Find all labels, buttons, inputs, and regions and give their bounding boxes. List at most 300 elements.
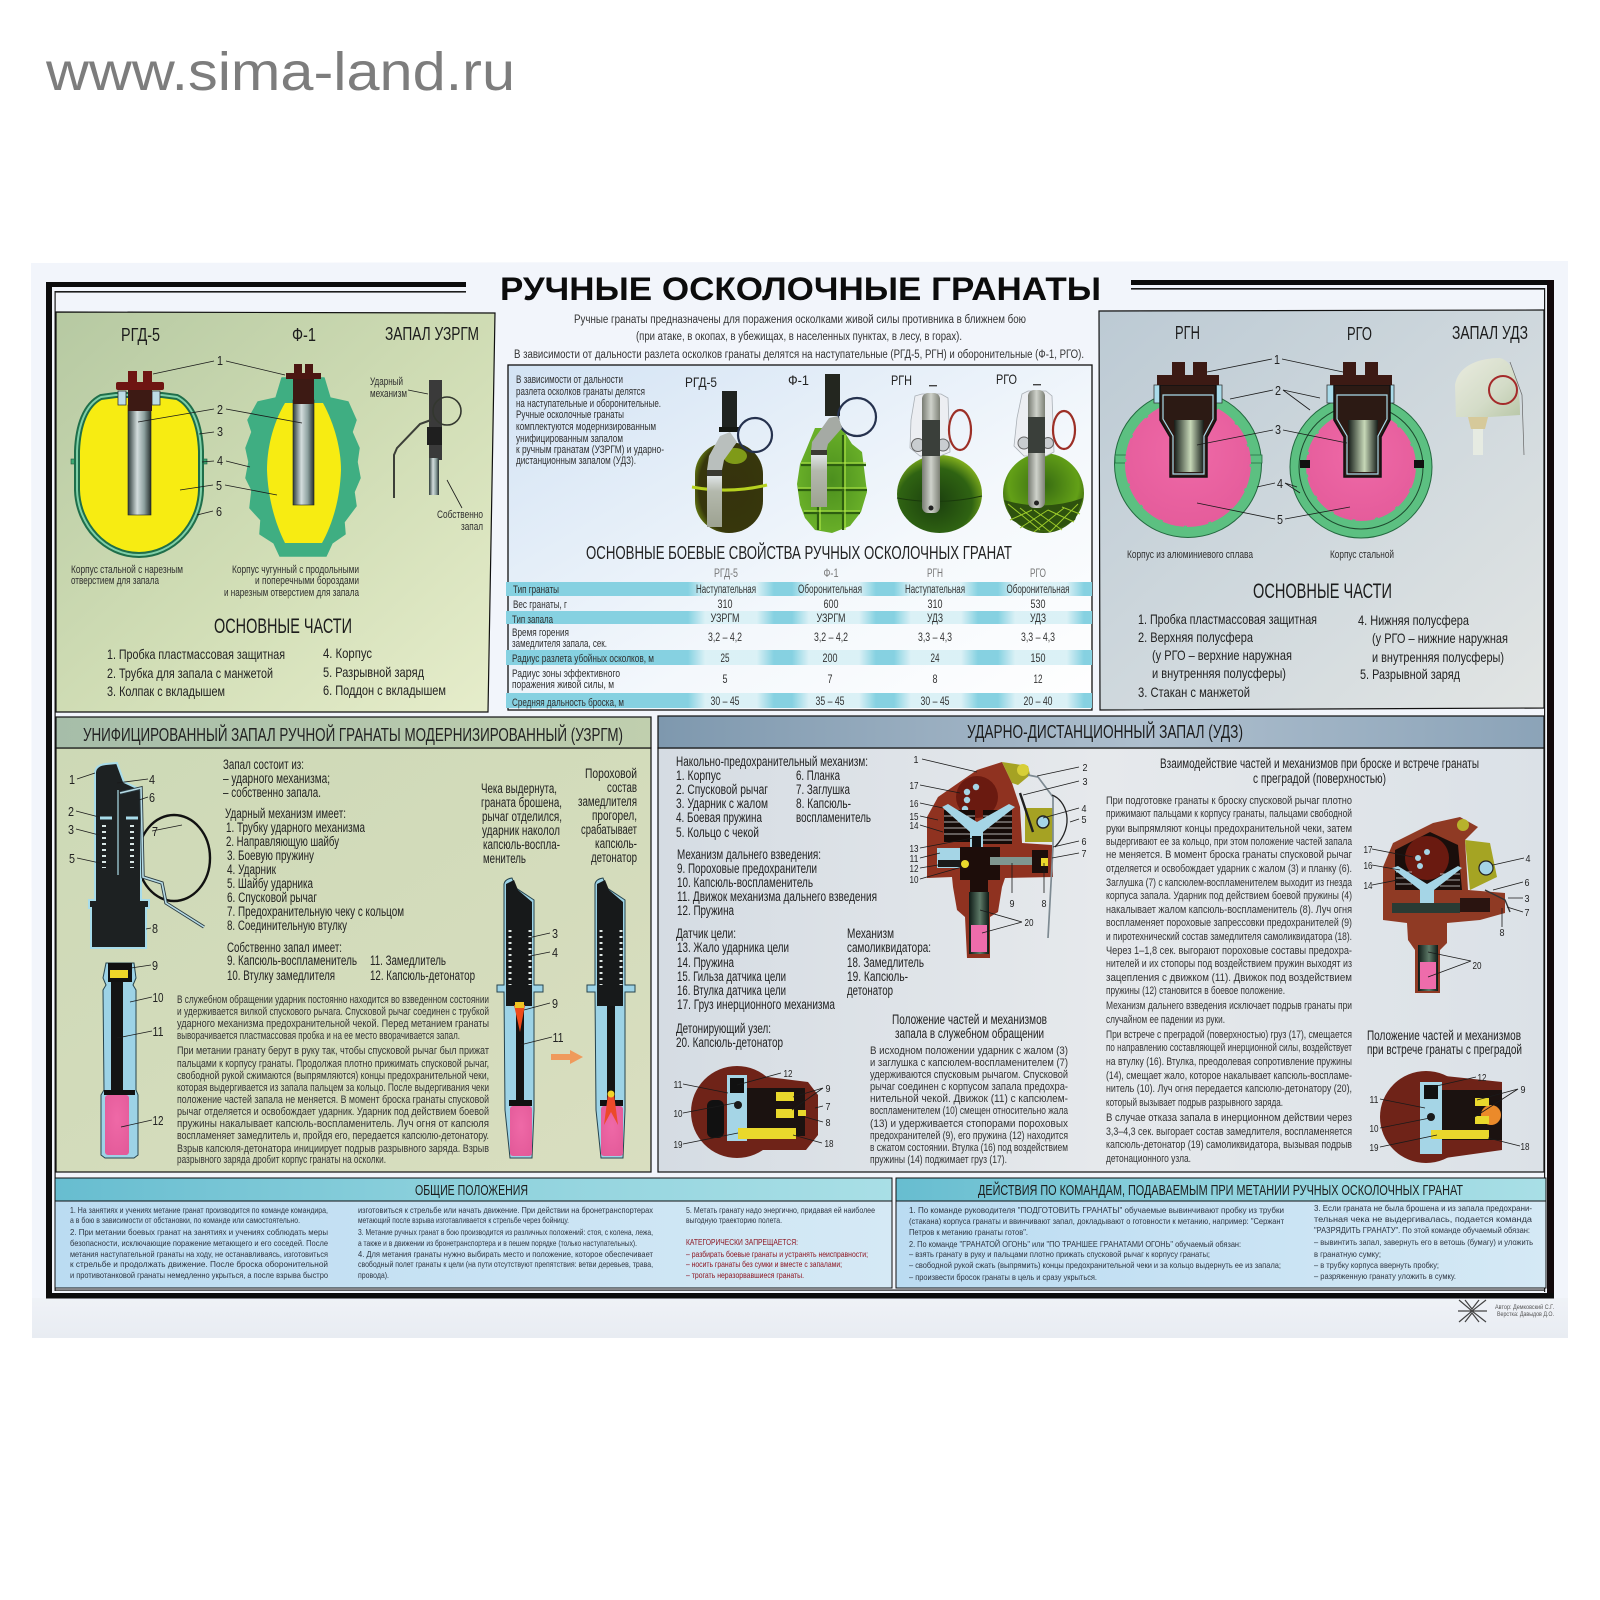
- fuse parts list: 8. Соединительную втулку: [227, 918, 347, 933]
- headings: [1175, 323, 1528, 344]
- fuse parts list: 3. Боевую пружину: [227, 848, 314, 863]
- part numbers: 7: [1082, 848, 1087, 860]
- column 2: – в трубку корпуса ввернуть пробку;: [1314, 1260, 1439, 1270]
- diagram: fuse body: [101, 963, 138, 1158]
- panel header: [658, 716, 1544, 748]
- row labels: Время горения: [512, 627, 569, 639]
- mechanism list: 5. Кольцо с чекой: [676, 825, 759, 840]
- values: УДЗ: [927, 613, 943, 625]
- diagram: fired state 2: [587, 878, 635, 1158]
- part numbers: 4: [1526, 853, 1531, 865]
- parts list: (у РГО – верхние наружная: [1152, 647, 1292, 663]
- subheading service position: Положение частей и механизмов: [892, 1012, 1047, 1027]
- state notes: Чека выдернута,: [481, 781, 557, 796]
- subheading impact position: при встрече гранаты с преградой: [1367, 1042, 1522, 1057]
- parts list: и внутренняя полусферы): [1372, 649, 1504, 665]
- column 2: [358, 1205, 654, 1280]
- part numbers: 5: [1277, 513, 1283, 527]
- part numbers: 2: [217, 403, 223, 417]
- description text: рычаг отделяется и освобождает ударник. Ударник под действием боевой: [177, 1106, 489, 1118]
- credits: Автор: Демковский С.Г.: [1495, 1303, 1554, 1311]
- text interaction: В случае отказа запала в инерционном действии через: [1106, 1112, 1352, 1124]
- row labels: Тип гранаты: [513, 584, 559, 596]
- parts list: [1138, 611, 1508, 700]
- grenade names: РГО: [996, 371, 1017, 387]
- fuse parts list: – ударного механизма;: [223, 771, 330, 786]
- mechanism list: самоликвидатора:: [847, 940, 931, 955]
- part numbers: 2: [1275, 384, 1281, 398]
- watermark: www.sima-land.ru: [45, 42, 515, 102]
- fuse parts list: 6. Спусковой рычаг: [227, 890, 317, 905]
- part numbers: 14: [910, 820, 919, 832]
- column 1: метания наступательной гранаты на ходу, не останавливаясь, изготовиться: [70, 1249, 328, 1259]
- captions: и поперечными бороздами: [255, 575, 359, 587]
- part numbers: 8: [826, 1117, 831, 1129]
- text interaction: случайном ее падении из руки.: [1106, 1014, 1225, 1026]
- column 3: выгодную траекторию полета.: [686, 1215, 782, 1225]
- fuse parts list: 12. Капсюль-детонатор: [370, 968, 475, 983]
- subheading service position: запала в служебном обращении: [895, 1026, 1044, 1041]
- panel: general provisions: [55, 1178, 892, 1288]
- part numbers: 1: [69, 773, 75, 787]
- mechanism list: 10. Капсюль-воспламенитель: [677, 875, 813, 890]
- leader lines: [138, 361, 462, 515]
- column 3: – трогать неразорвавшиеся гранаты.: [686, 1270, 804, 1280]
- text service position: нительной чекой. Движок (11) с капсюлем-: [870, 1093, 1068, 1105]
- fuse parts list: [223, 757, 475, 983]
- mechanism list: 16. Втулка датчика цели: [677, 983, 786, 998]
- headings: РГН: [1175, 323, 1200, 343]
- column 3: [686, 1205, 875, 1280]
- text interaction: нителей и их стопоры под воздействием пружин выходят из: [1106, 958, 1352, 970]
- mechanism list: 4. Боевая пружина: [676, 810, 762, 825]
- part numbers: 2: [1082, 762, 1088, 774]
- ring: [138, 815, 210, 901]
- part numbers: 17: [910, 780, 919, 792]
- diagram: UDZ on impact top view: [1380, 1071, 1502, 1163]
- description text: [177, 994, 489, 1166]
- cell highlights: [688, 582, 1084, 708]
- part numbers: 18: [824, 1138, 834, 1150]
- part numbers: 15: [910, 811, 919, 823]
- part numbers: 1: [217, 354, 223, 368]
- part numbers: 4: [1277, 477, 1283, 491]
- description text: свободной рукой сжимаются (выпрямляются) концы предохранительной чеки,: [177, 1070, 489, 1082]
- column 3: – носить гранаты без сумки и вместе с запалами;: [686, 1259, 842, 1269]
- column 2: изготовиться к стрельбе или начать движение. При действии на бронетранспортерах: [358, 1205, 654, 1215]
- values: 5: [722, 674, 728, 686]
- intro text: В зависимости от дальности разлета осколков гранаты делятся на наступательные (РГД-5, РГН) и оборонительные (Ф-1, РГО).: [514, 349, 1084, 361]
- parts list: [107, 645, 446, 699]
- part numbers: 11: [910, 853, 919, 865]
- column 1: а в бою в зависимости от обстановки, по команде или самостоятельно.: [70, 1215, 300, 1225]
- description text: В служебном обращении ударник постоянно находится во взведенном состоянии: [177, 994, 489, 1006]
- diagram: RGO section: [1290, 362, 1432, 538]
- part numbers: [674, 754, 1088, 1151]
- column 1: (стакана) корпуса гранаты и ввинчивают запал, докладывают о готовности к метанию, например: "Сержант: [909, 1216, 1284, 1226]
- state notes: капсюль-воспла-: [483, 837, 560, 852]
- state notes: капсюль-: [595, 836, 637, 851]
- values: 3,2 – 4,2: [708, 632, 742, 644]
- part numbers: 8: [152, 922, 158, 936]
- column 2: – разряженную гранату уложить в сумку.: [1314, 1271, 1456, 1281]
- diagram: RGD-5 section: [71, 371, 207, 555]
- column 2: тельная чека не выдергивалась, подается команда: [1314, 1214, 1532, 1224]
- poster sheet: [31, 261, 1568, 1338]
- leader lines: [683, 759, 1079, 1144]
- mechanism list: 12. Пружина: [677, 903, 734, 918]
- arrow: [551, 1050, 583, 1064]
- panel header: [55, 1178, 892, 1201]
- part numbers: 4: [149, 773, 155, 787]
- text interaction: нитель (10). Луч огня передается капсюлю-детонатору (20),: [1106, 1083, 1352, 1095]
- text interaction: 3,3–4,3 сек. выгорает состав замедлителя, воспламеняется: [1106, 1126, 1352, 1138]
- parts list: (у РГО – нижние наружная: [1372, 630, 1508, 646]
- frame: [46, 280, 1554, 1298]
- mechanism list: детонатор: [847, 983, 893, 998]
- row bands: [506, 582, 1092, 708]
- column 2: – вывинтить запал, завернуть его в ветошь (бумагу) и уложить: [1314, 1237, 1533, 1247]
- mechanism list: Датчик цели:: [676, 926, 736, 941]
- photo: RGD-5: [692, 391, 772, 533]
- part numbers: 8: [1042, 898, 1047, 910]
- values: 30 – 45: [710, 696, 740, 708]
- text service position: в сжатом состоянии. Втулка (16) под воздействием: [870, 1142, 1068, 1154]
- values: 600: [824, 599, 838, 611]
- text service position: предохранителей (9), его пружина (12) находится: [870, 1130, 1068, 1142]
- mechanism list: Механизм: [847, 926, 894, 941]
- fuse parts list: 1. Трубку ударного механизма: [226, 820, 365, 835]
- captions: Ударный: [370, 376, 403, 388]
- part numbers: 12: [1478, 1072, 1487, 1084]
- heading main parts: ОСНОВНЫЕ ЧАСТИ: [1253, 580, 1392, 603]
- heading main parts: ОСНОВНЫЕ ЧАСТИ: [214, 615, 352, 638]
- grenade names: Ф-1: [788, 372, 809, 388]
- fuse parts list: Запал состоит из:: [223, 757, 304, 772]
- values: 35 – 45: [816, 696, 844, 708]
- column 2: 3. Если граната не была брошена и из запала предохрани-: [1314, 1203, 1532, 1213]
- mechanism list: 2. Спусковой рычаг: [676, 782, 768, 797]
- description text: положение частей запала не меняется. В момент броска гранаты спусковой: [177, 1094, 489, 1106]
- column 1: 1. На занятиях и учениях метание гранат производится по команде командира,: [70, 1205, 328, 1215]
- mechanism list: 13. Жало ударника цели: [677, 940, 789, 955]
- photo: RGO: [1003, 384, 1084, 533]
- text interaction: руки выпрямляют концы предохранительной чеки, затем: [1106, 823, 1352, 835]
- panel: RGD-5 and F-1: [56, 312, 495, 712]
- column 1: к стрельбе и продолжать движение. После броска оборонительной: [70, 1259, 328, 1269]
- state notes: детонатор: [591, 850, 637, 865]
- state notes: замедлителя: [578, 794, 637, 809]
- row labels: [512, 584, 654, 709]
- text service position: и заглушка с капсюлем-воспламенителем (7): [870, 1057, 1068, 1069]
- text interaction: отделяется и освобождает ударник с жалом (3) и планку (6).: [1106, 863, 1352, 875]
- captions: механизм: [370, 388, 407, 400]
- mechanism list: 9. Пороховые предохранители: [677, 861, 817, 876]
- column 1: [70, 1205, 328, 1280]
- text interaction: накалывает жалом капсюль-воспламенитель (8). Луч огня: [1106, 904, 1352, 916]
- diagram: striker mechanism: [89, 763, 204, 948]
- description text: пружины накалывает капсюль-воспламенитель. Луч огня от капсюля: [177, 1118, 489, 1130]
- state notes: состав: [607, 780, 637, 795]
- part numbers: 19: [674, 1139, 683, 1151]
- captions: Корпус стальной: [1330, 549, 1394, 561]
- intro note: унифицированным запалом: [516, 433, 623, 445]
- mechanism list: Механизм дальнего взведения:: [677, 847, 821, 862]
- intro text: (при атаке, в окопах, в убежищах, в населенных пунктах, в лесу, в горах).: [636, 331, 962, 343]
- captions: [71, 376, 483, 599]
- captions: отверстием для запала: [71, 575, 160, 587]
- headings RGD-5 F-1 UZRGM: ЗАПАЛ УЗРГМ: [385, 324, 479, 344]
- part numbers: 9: [152, 959, 158, 973]
- description text: При метании гранату берут в руку так, чтобы спусковой рычаг был прижат: [177, 1045, 489, 1057]
- fuse parts list: 7. Предохранительную чеку с кольцом: [227, 904, 404, 919]
- headings RGD-5 F-1 UZRGM: Ф-1: [292, 325, 316, 345]
- diagram: fired state 1: [497, 878, 543, 1158]
- intro text: [514, 314, 1084, 361]
- part numbers: 14: [1364, 880, 1373, 892]
- text interaction: зацепления с движком (11). Движок под воздействием: [1106, 972, 1352, 984]
- intro note: Ручные осколочные гранаты: [516, 409, 624, 421]
- parts list: 4. Корпус: [323, 645, 372, 661]
- part numbers: 3: [217, 425, 223, 439]
- text interaction: [1106, 795, 1353, 1165]
- values: 20 – 40: [1024, 696, 1052, 708]
- description text: выворачивается пластмассовая пробка и на ее место вворачивается запал.: [177, 1030, 460, 1042]
- part numbers: 17: [1364, 844, 1373, 856]
- panel header: [896, 1178, 1546, 1201]
- part numbers: 6: [1524, 877, 1530, 889]
- values: 25: [720, 653, 730, 665]
- text interaction: (14), смещает жало, которое накалывает капсюль-воспламе-: [1106, 1070, 1352, 1082]
- column 2: 3. Метание ручных гранат в бою производится из различных положений: стоя, с колена, лежа,: [358, 1227, 653, 1237]
- panel header: [56, 717, 651, 748]
- fuse parts list: 5. Шайбу ударника: [227, 876, 313, 891]
- text interaction: на втулку (16). Втулка, преодолевая сопротивление пружины: [1106, 1056, 1352, 1068]
- part numbers: 7: [152, 825, 158, 839]
- mechanism list: 14. Пружина: [677, 955, 734, 970]
- text interaction: Заглушка (7) с капсюлем-воспламенителем выходит из гнезда: [1106, 877, 1353, 889]
- captions: и нарезным отверстием для запала: [224, 587, 360, 599]
- description text: Взрыв капсюля-детонатора инициирует подрыв разрывного заряда. Взрыв: [177, 1143, 489, 1155]
- part numbers: 10: [1370, 1123, 1379, 1135]
- captions: Корпус из алюминиевого сплава: [1127, 549, 1254, 561]
- mechanism list: 17. Груз инерционного механизма: [677, 997, 835, 1012]
- part numbers: 20: [1472, 960, 1482, 972]
- state notes: [481, 766, 637, 866]
- text service position: пружины (14) поджимает груз (17).: [870, 1154, 1007, 1166]
- text service position: рычаг соединен с корпусом запала предохра-: [870, 1081, 1068, 1093]
- part numbers: 10: [674, 1108, 683, 1120]
- subheading interaction: [1160, 756, 1479, 786]
- part numbers: 6: [216, 505, 222, 519]
- intro text: Ручные гранаты предназначены для поражения осколками живой силы противника в ближнем бою: [574, 314, 1026, 326]
- mechanism list: 8. Капсюль-: [796, 796, 851, 811]
- column 1: и противотанковой гранаты немедленно укрыться, а после взрыва быстро: [70, 1270, 328, 1280]
- part numbers: [1274, 353, 1283, 527]
- column 1: [909, 1205, 1284, 1282]
- headings RGD-5 F-1 UZRGM: РГД-5: [121, 325, 160, 345]
- panel header: УДАРНО-ДИСТАНЦИОННЫЙ ЗАПАЛ (УДЗ): [967, 721, 1243, 742]
- column 2: в гранатную сумку;: [1314, 1249, 1381, 1259]
- credits: Верстка: Давыдов Д.О.: [1497, 1311, 1554, 1318]
- state notes: ударник наколол: [482, 823, 560, 838]
- panel header: ОБЩИЕ ПОЛОЖЕНИЯ: [415, 1182, 528, 1199]
- values: 7: [828, 674, 832, 686]
- intro note: В зависимости от дальности: [516, 374, 623, 386]
- values: 200: [822, 653, 838, 665]
- parts list: 6. Поддон с вкладышем: [323, 682, 446, 698]
- diagram: UDZ section: [927, 762, 1067, 958]
- table heading: ОСНОВНЫЕ БОЕВЫЕ СВОЙСТВА РУЧНЫХ ОСКОЛОЧНЫХ ГРАНАТ: [586, 542, 1012, 563]
- panel: grenades and table: [506, 365, 1092, 710]
- diagram: F-1 section: [246, 364, 360, 556]
- part numbers: 1: [1274, 353, 1280, 367]
- mechanism list: 6. Планка: [796, 768, 840, 783]
- intro note: на наступательные и оборонительные.: [516, 398, 661, 410]
- column 3: 5. Метать гранату надо энергично, придавая ей наиболее: [686, 1205, 875, 1215]
- parts list: 1. Пробка пластмассовая защитная: [107, 646, 285, 662]
- column 2: 4. Для метания гранаты нужно выбирать место и положение, которое обеспечивает: [358, 1249, 653, 1259]
- parts list: 2. Верхняя полусфера: [1138, 629, 1253, 645]
- row labels: Средняя дальность броска, м: [512, 697, 624, 709]
- text interaction: Через 1–1,8 сек. выгорают пороховые составы предохра-: [1106, 945, 1352, 957]
- column 2: [1314, 1203, 1533, 1281]
- text interaction: Механизм дальнего взведения исключает подрыв гранаты при: [1106, 1000, 1352, 1012]
- intro note: разлета осколков гранаты делятся: [516, 386, 645, 398]
- fuse parts list: 11. Замедлитель: [370, 953, 446, 968]
- part numbers: 11: [674, 1079, 683, 1091]
- part numbers: [1364, 844, 1531, 1154]
- state notes: граната брошена,: [481, 795, 562, 810]
- part numbers: 12: [910, 863, 919, 875]
- part numbers: 13: [910, 843, 919, 855]
- values: Наступательная: [696, 584, 756, 596]
- part numbers: 4: [1082, 803, 1087, 815]
- diagram: UDZ on impact: [1383, 817, 1510, 993]
- state notes: менитель: [483, 851, 526, 866]
- values: УДЗ: [1030, 613, 1046, 625]
- leader lines: [1372, 849, 1524, 1147]
- column 2: "РАЗРЯДИТЬ ГРАНАТУ". По этой команде обучаемый обязан:: [1314, 1225, 1530, 1235]
- row labels: Радиус зоны эффективного: [512, 668, 620, 680]
- values: [696, 584, 1070, 708]
- part numbers: 10: [910, 874, 919, 886]
- diagram: UDZ top view: [691, 1066, 818, 1158]
- text interaction: и пиротехнический состав замедлителя самоликвидатора (18).: [1106, 931, 1352, 943]
- intro note: к ручным гранатам (УЗРГМ) и ударно-: [516, 444, 664, 456]
- column 1: 1. По команде руководителя "ПОДГОТОВИТЬ ГРАНАТЫ" обучаемые вывинчивают пробку из трубки: [909, 1205, 1284, 1215]
- column 1: – взять гранату в руку и пальцами плотно прижать спусковой рычаг к корпусу гранаты;: [909, 1249, 1210, 1259]
- mechanism list: 15. Гильза датчика цели: [677, 969, 786, 984]
- headings: РГО: [1347, 324, 1372, 344]
- headings: ЗАПАЛ УДЗ: [1452, 323, 1528, 343]
- panel: UZRGM fuse: [56, 717, 651, 1172]
- values: 150: [1030, 653, 1046, 665]
- part numbers: 12: [152, 1114, 164, 1128]
- values: 12: [1034, 674, 1042, 686]
- text interaction: по направлению составляющей инерционной силы, воздействует: [1106, 1042, 1352, 1054]
- text interaction: выдергивают ее за кольцо, при этом положение частей запала: [1106, 836, 1353, 848]
- part numbers: 12: [784, 1068, 793, 1080]
- description text: разрывного заряда дробит корпус гранаты на осколки.: [177, 1154, 386, 1166]
- part numbers: 16: [910, 798, 919, 810]
- captions: запал: [461, 521, 483, 533]
- part numbers: [68, 773, 564, 1128]
- leader lines: [1197, 359, 1350, 519]
- text service position: [870, 1045, 1069, 1166]
- column 2: а также и в движении из бронетранспортера и в пешем порядке (только наступательных).: [358, 1238, 637, 1248]
- part numbers: 11: [1370, 1094, 1379, 1106]
- photo: F-1: [797, 374, 876, 533]
- title: РУЧНЫЕ ОСКОЛОЧНЫЕ ГРАНАТЫ: [500, 271, 1101, 307]
- part numbers: 5: [69, 852, 75, 866]
- panel: RGN and RGO: [1099, 310, 1544, 710]
- text interaction: который вызывает подрыв разрывного заряда.: [1106, 1097, 1283, 1109]
- photo: UDZ fuse: [1455, 358, 1524, 455]
- column 1: Петров к метанию гранаты готов".: [909, 1227, 1028, 1237]
- fuse parts list: 9. Капсюль-воспламенитель: [227, 953, 357, 968]
- intro note: дистанционным запалом (УДЗ).: [516, 455, 636, 467]
- values: 8: [932, 674, 938, 686]
- text interaction: При подготовке гранаты к броску спусковой рычаг плотно: [1106, 795, 1352, 807]
- column 3: КАТЕГОРИЧЕСКИ ЗАПРЕЩАЕТСЯ:: [686, 1237, 798, 1247]
- credits: [1495, 1303, 1554, 1318]
- diagram: RGN section: [1114, 362, 1262, 538]
- fuse parts list: 2. Направляющую шайбу: [226, 834, 339, 849]
- fuse parts list: Собственно запал имеет:: [227, 940, 342, 955]
- part numbers: 6: [1082, 836, 1087, 848]
- subheading impact position: [1367, 1028, 1522, 1057]
- values: Оборонительная: [1006, 584, 1070, 596]
- values: 3,3 – 4,3: [1021, 632, 1055, 644]
- row labels: Вес гранаты, г: [513, 599, 567, 611]
- state notes: Пороховой: [585, 766, 637, 781]
- column 1: безопасности, исключающие поражение метающего и его соседей. После: [70, 1238, 328, 1248]
- part numbers: 7: [826, 1101, 831, 1113]
- mechanism list: [676, 754, 931, 1050]
- parts list: 5. Разрывной заряд: [1360, 666, 1460, 682]
- icon: publisher logo: [1458, 1300, 1487, 1322]
- part numbers: [216, 354, 223, 519]
- part numbers: 2: [68, 805, 74, 819]
- values: 3,2 – 4,2: [814, 632, 848, 644]
- column 2: провода).: [358, 1270, 389, 1280]
- captions: Собственно: [437, 509, 483, 521]
- values: 24: [930, 653, 940, 665]
- column 3: – разбирать боевые гранаты и устранять неисправности;: [686, 1249, 868, 1259]
- part numbers: 5: [1082, 814, 1087, 826]
- fuse parts list: Ударный механизм имеет:: [225, 806, 346, 821]
- fuse parts list: 10. Втулку замедлителя: [227, 968, 335, 983]
- grenade names: РГН: [891, 372, 912, 388]
- intro note: комплектуются модернизированным: [516, 421, 656, 433]
- column names: РГН: [927, 568, 943, 580]
- part numbers: 3: [552, 927, 558, 941]
- values: УЗРГМ: [816, 613, 846, 625]
- text service position: (13) и удерживается стопорами пороховых: [870, 1118, 1068, 1130]
- part numbers: 20: [1024, 917, 1034, 929]
- description text: воспламеняет замедлитель и, пройдя его, передается капсюлю-детонатору.: [177, 1130, 489, 1142]
- parts list: 5. Разрывной заряд: [323, 664, 424, 680]
- state notes: срабатывает: [581, 822, 637, 837]
- values: 530: [1030, 599, 1046, 611]
- text interaction: корпуса запала. Ударник под действием боевой пружины (4): [1106, 890, 1352, 902]
- panel: actions on commands: [896, 1178, 1546, 1288]
- column 1: 2. По команде "ГРАНАТОЙ ОГОНЬ" или "ПО ТРАНШЕЕ ГРАНАТАМИ ОГОНЬ" обучаемый обязан:: [909, 1238, 1241, 1249]
- row labels: замедлителя запала, сек.: [512, 638, 607, 650]
- values: Оборонительная: [798, 584, 862, 596]
- part numbers: 6: [149, 791, 155, 805]
